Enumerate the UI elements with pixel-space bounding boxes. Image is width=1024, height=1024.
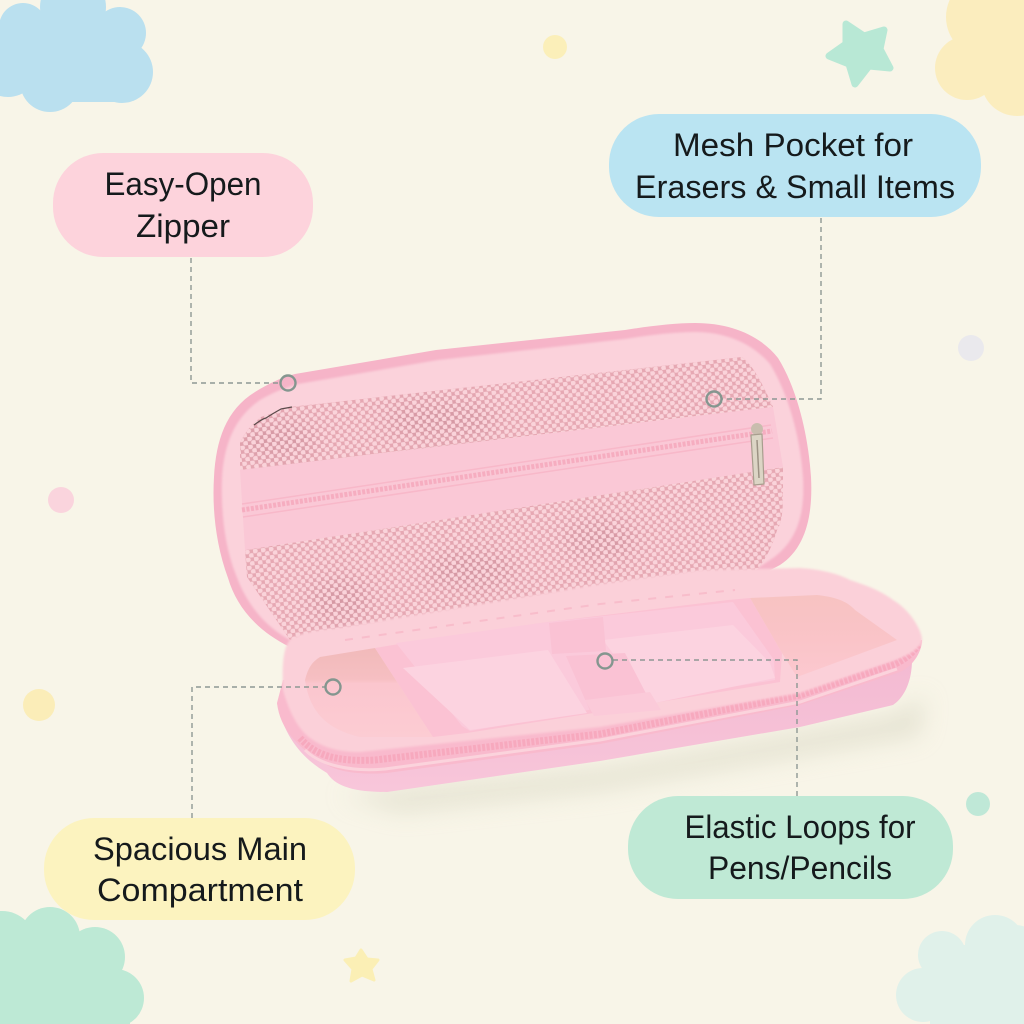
mesh pocket zip band	[240, 407, 783, 550]
callout: Elastic Loops: Elastic Loops for	[684, 809, 916, 845]
pocket fabric	[396, 602, 775, 731]
tray body	[277, 660, 912, 792]
mesh corner wire	[254, 407, 292, 425]
zipper track	[242, 425, 773, 517]
rim stitching	[345, 590, 735, 640]
case shadow	[340, 695, 925, 812]
tray rim	[283, 568, 922, 752]
marker: elastic loops	[598, 654, 612, 668]
callout: Easy-Open Zipper: Zipper	[136, 208, 230, 244]
callout: Easy-Open Zipper	[53, 153, 313, 257]
zipper teeth	[242, 431, 772, 510]
pencil case product	[214, 323, 925, 812]
upper lid	[214, 323, 811, 650]
zipper teeth	[300, 645, 918, 760]
marker: mesh pocket	[706, 392, 722, 406]
marker: main compartment	[326, 680, 340, 694]
elastic loop	[549, 617, 661, 716]
cloud: top left blue	[0, 0, 153, 112]
mesh dots	[235, 350, 790, 650]
callout: Elastic Loops	[628, 796, 953, 899]
floor right	[750, 595, 897, 677]
star: green	[829, 24, 890, 84]
callout: Mesh Pocket: Mesh Pocket for	[673, 127, 913, 163]
cloud: bottom right pale	[896, 915, 1024, 1024]
lid outer shell	[214, 323, 811, 647]
callout: Spacious Main Compartment: Spacious Main	[93, 831, 307, 867]
cloud: top right yellow	[935, 0, 1024, 116]
callout lines	[191, 218, 821, 818]
star: yellow	[345, 950, 378, 981]
pocket border	[375, 598, 782, 737]
pocket left flap	[403, 650, 587, 730]
tray zipper band	[277, 640, 922, 774]
floor left	[305, 648, 433, 737]
zipper pull	[751, 423, 764, 485]
mesh blotches	[242, 402, 636, 622]
callout: Easy-Open Zipper: Easy-Open	[104, 166, 262, 202]
lower tray	[277, 568, 922, 792]
decorative dots	[23, 35, 990, 816]
mesh backing	[235, 350, 790, 650]
callout: Mesh Pocket	[609, 114, 981, 217]
zipper lip highlight	[305, 669, 897, 770]
callout: Mesh Pocket: Erasers & Small Items	[635, 169, 955, 205]
pocket right flap	[603, 625, 775, 704]
marker: zipper	[280, 376, 296, 390]
callout: Spacious Main Compartment	[44, 818, 355, 920]
lid fabric lining	[222, 332, 803, 640]
callout: Elastic Loops: Pens/Pencils	[708, 850, 892, 886]
mesh pockets	[235, 350, 790, 650]
cloud: bottom left green	[0, 907, 144, 1024]
callout: Spacious Main Compartment: Compartment	[97, 872, 303, 908]
